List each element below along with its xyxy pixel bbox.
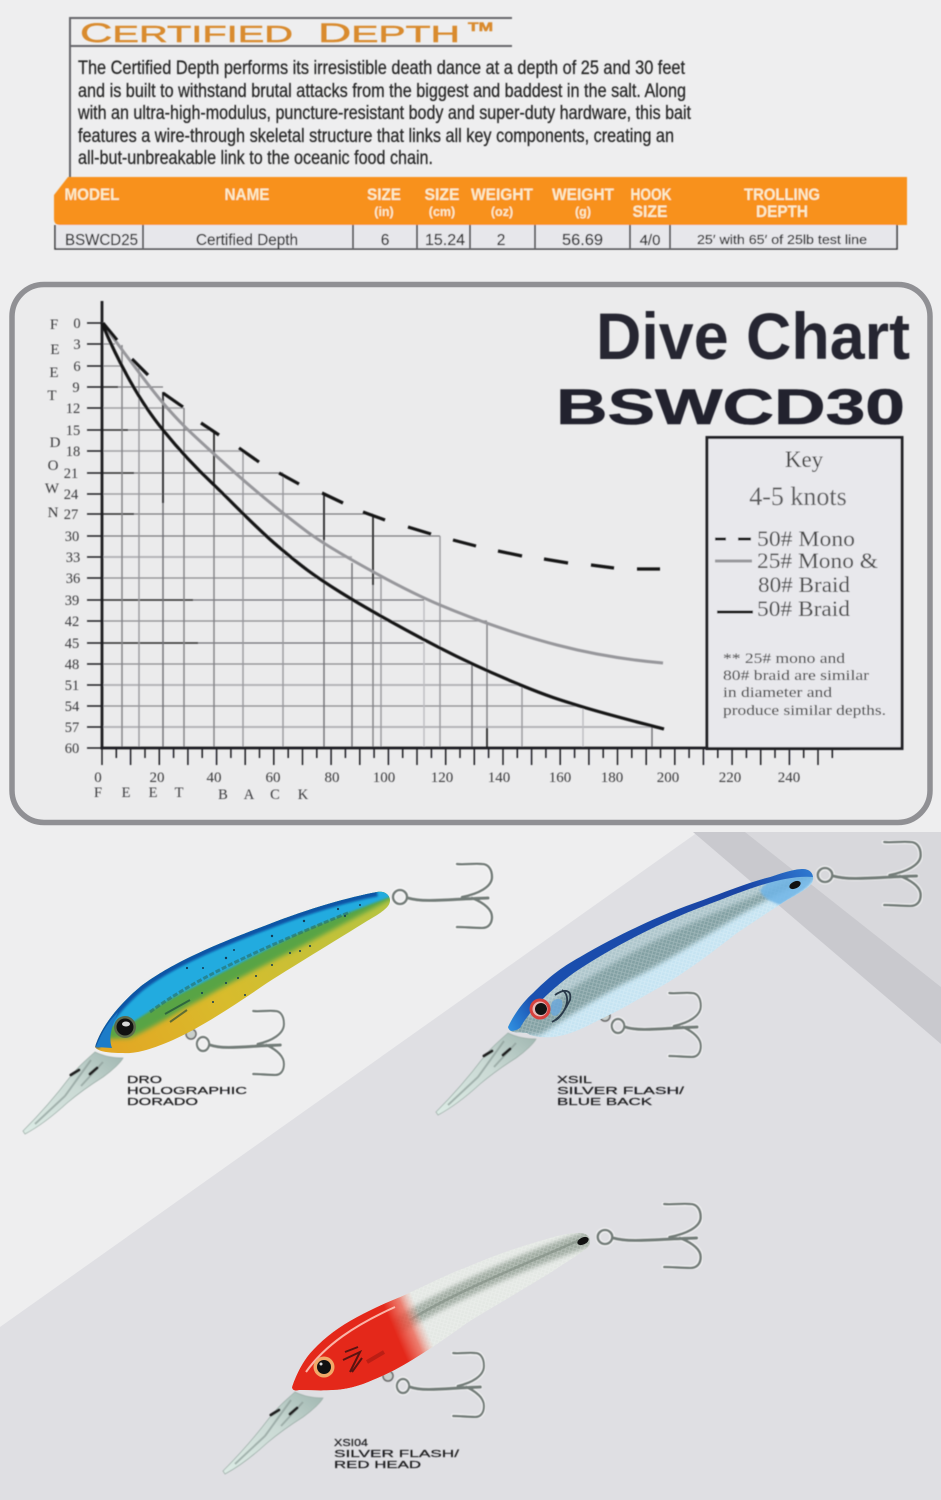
table data row: 25′ with 65′ of 25lb test line (697, 232, 867, 247)
lure label: BLUE BACK (557, 1096, 652, 1108)
tail hook (393, 864, 492, 928)
vertical grid lines (122, 345, 652, 748)
x axis numbers: 40 (206, 770, 222, 786)
legend footnote (723, 651, 886, 719)
x axis numbers: 140 (488, 770, 510, 786)
curve: 50# mono dashed (103, 323, 660, 569)
x axis numbers: 60 (266, 770, 280, 786)
y axis numbers: 27 (64, 507, 78, 523)
table data row: Certified Depth (196, 232, 298, 249)
x axis title: feet back (94, 785, 309, 803)
lure label (557, 1074, 684, 1108)
lure label (334, 1437, 459, 1471)
x axis numbers: 100 (373, 770, 395, 786)
y axis numbers: 24 (64, 487, 79, 503)
y axis title: feet down: O (48, 458, 59, 474)
y axis numbers: 51 (65, 678, 79, 694)
table header bar: (g) (575, 205, 591, 219)
header frame lines (70, 18, 512, 178)
description text: and is built to withstand brutal attacks from the biggest and baddest in the salt. Along (78, 81, 686, 102)
legend labels: 25# Mono & (757, 548, 878, 573)
legend footnote: ** 25# mono and (723, 651, 846, 667)
table header bar: (oz) (491, 205, 513, 219)
description text: all-but-unbreakable link to the oceanic food chain. (78, 148, 433, 169)
table header bar: DEPTH (756, 203, 808, 221)
y axis numbers: 9 (72, 380, 80, 396)
y axis numbers: 0 (73, 316, 81, 332)
line chart: feet down vs feet back (45, 301, 850, 803)
lure label: DORADO (127, 1096, 198, 1108)
table header bar: NAME (224, 186, 270, 204)
y axis numbers (64, 316, 81, 757)
table data row: BSWCD25 (65, 232, 138, 249)
legend footnote: in diameter and (723, 685, 833, 701)
y axis title: feet down: N (48, 505, 59, 521)
y axis numbers: 3 (73, 337, 81, 353)
lure label: DRO (127, 1074, 162, 1086)
y axis numbers: 57 (65, 720, 79, 736)
y axis title: feet down: T (47, 388, 57, 404)
x axis numbers: 220 (719, 770, 741, 786)
y axis title: feet down: E (50, 342, 60, 358)
title: TM (468, 20, 493, 34)
table header bar: MODEL (64, 186, 120, 204)
curve: 50# braid (102, 323, 664, 729)
x axis numbers: 80 (324, 770, 340, 786)
y axis numbers: 54 (65, 699, 80, 715)
header block: Certified Depth (70, 18, 692, 178)
lure eye (114, 1016, 136, 1038)
lure body (95, 892, 390, 1054)
x axis title: feet back: T (175, 785, 184, 801)
table data row: 15.24 (425, 232, 465, 249)
legend footnote: 80# braid are similar (723, 668, 869, 684)
panel frame (12, 284, 930, 822)
y axis numbers: 30 (65, 529, 79, 545)
panel: dive chart (12, 284, 930, 822)
x axis title: feet back: E (149, 785, 158, 801)
axes (87, 301, 850, 765)
lure label: XSIL (557, 1074, 592, 1086)
y axis numbers: 21 (64, 466, 78, 482)
table header bar: WEIGHT (552, 186, 614, 204)
legend key box: 4-5 knots (749, 482, 847, 511)
curve: 25# mono and 80# braid (102, 323, 663, 663)
legend sample: 50# braid (717, 610, 753, 614)
table data row (55, 225, 897, 249)
table header bar: SIZE (367, 186, 401, 204)
y axis numbers: 42 (65, 614, 79, 630)
legend key box: Key (785, 447, 824, 472)
y axis title: feet down: D (50, 435, 61, 451)
chart model code: BSWCD30 (556, 379, 905, 435)
y axis numbers: 45 (65, 636, 79, 652)
y axis title: feet down (45, 317, 61, 521)
x axis title: feet back: B (218, 787, 228, 803)
specification table (54, 177, 907, 249)
table header bar: (cm) (429, 205, 455, 219)
legend labels: 50# Braid (757, 596, 850, 621)
table data row: 4/0 (640, 232, 660, 249)
diving lip (223, 1392, 323, 1474)
description text: features a wire-through skeletal structure that links all key components, creating an (78, 126, 674, 147)
legend sample: 25# mono and 80# braid (715, 560, 752, 562)
lure label: SILVER FLASH/ (557, 1085, 684, 1097)
y axis numbers: 39 (65, 593, 79, 609)
tail hook (818, 842, 921, 906)
belly hook (600, 993, 701, 1057)
title: C ERTIFIED (80, 18, 293, 48)
horizontal grid lines (102, 344, 652, 727)
lure: XSI04 silver flash red head (223, 1204, 701, 1474)
lure label: RED HEAD (334, 1459, 422, 1471)
y axis title: feet down: E (49, 365, 59, 381)
table header bar: WEIGHT (471, 186, 533, 204)
y axis numbers: 6 (73, 359, 81, 375)
lure: DRO holographic dorado (23, 864, 492, 1134)
legend labels: 80# Braid (758, 572, 850, 597)
title (80, 18, 493, 48)
y axis numbers: 12 (66, 401, 80, 417)
belly hook (383, 1353, 484, 1417)
lure label (127, 1074, 248, 1108)
legend labels: 50# Mono (757, 526, 855, 551)
table data row: 2 (497, 232, 505, 249)
table header bar: HOOK (630, 186, 672, 204)
lure body (508, 869, 814, 1038)
x axis title: feet back: F (94, 785, 102, 801)
x axis title: feet back: E (122, 785, 131, 801)
y axis numbers: 36 (66, 571, 80, 587)
description text: with an ultra-high-modulus, puncture-resistant body and super-duty hardware, this bait (77, 103, 692, 124)
lure label: XSI04 (334, 1437, 368, 1449)
lure label: HOLOGRAPHIC (127, 1085, 248, 1097)
title: D EPTH (318, 18, 460, 48)
table header bar: SIZE (632, 203, 668, 221)
legend sample: 50# mono (715, 538, 751, 540)
description text (77, 58, 692, 169)
y axis numbers: 48 (65, 657, 79, 673)
y axis title: feet down: F (50, 317, 58, 333)
lure label: SILVER FLASH/ (334, 1448, 459, 1460)
lure body (292, 1233, 590, 1390)
x axis numbers: 200 (657, 770, 679, 786)
legend key box (707, 438, 902, 748)
description text: The Certified Depth performs its irresistible death dance at a depth of 25 and 30 feet (78, 58, 686, 79)
legend labels (757, 526, 878, 621)
belly hook (186, 1011, 284, 1075)
x axis numbers: 160 (549, 770, 571, 786)
lure: XSIL silver flash blue back (436, 842, 921, 1115)
lure eye (530, 998, 550, 1020)
x axis numbers (94, 770, 800, 786)
y axis numbers: 33 (66, 550, 80, 566)
table header bar: TROLLING (744, 186, 820, 204)
y axis numbers: 15 (66, 423, 80, 439)
tail hook (598, 1204, 701, 1268)
x axis title: feet back: C (270, 787, 280, 803)
table data row: 56.69 (562, 232, 603, 249)
x axis numbers: 0 (94, 770, 102, 786)
y axis title: feet down: W (45, 481, 60, 497)
diving lip (23, 1052, 123, 1134)
legend footnote: produce similar depths. (723, 703, 886, 719)
x axis numbers: 20 (150, 770, 164, 786)
x axis numbers: 240 (778, 770, 800, 786)
diving lip (436, 1033, 536, 1115)
lure eye (314, 1356, 334, 1378)
table header bar: (in) (374, 205, 394, 219)
y axis numbers: 60 (65, 741, 79, 757)
x axis title: feet back: K (298, 787, 309, 803)
chart title: Dive Chart (596, 299, 910, 373)
table data row: 6 (381, 232, 389, 249)
x axis numbers: 120 (431, 770, 453, 786)
y axis numbers: 18 (66, 444, 80, 460)
table header bar: SIZE (424, 186, 460, 204)
table header bar (54, 177, 907, 225)
x axis numbers: 180 (601, 770, 623, 786)
x axis title: feet back: A (244, 787, 255, 803)
